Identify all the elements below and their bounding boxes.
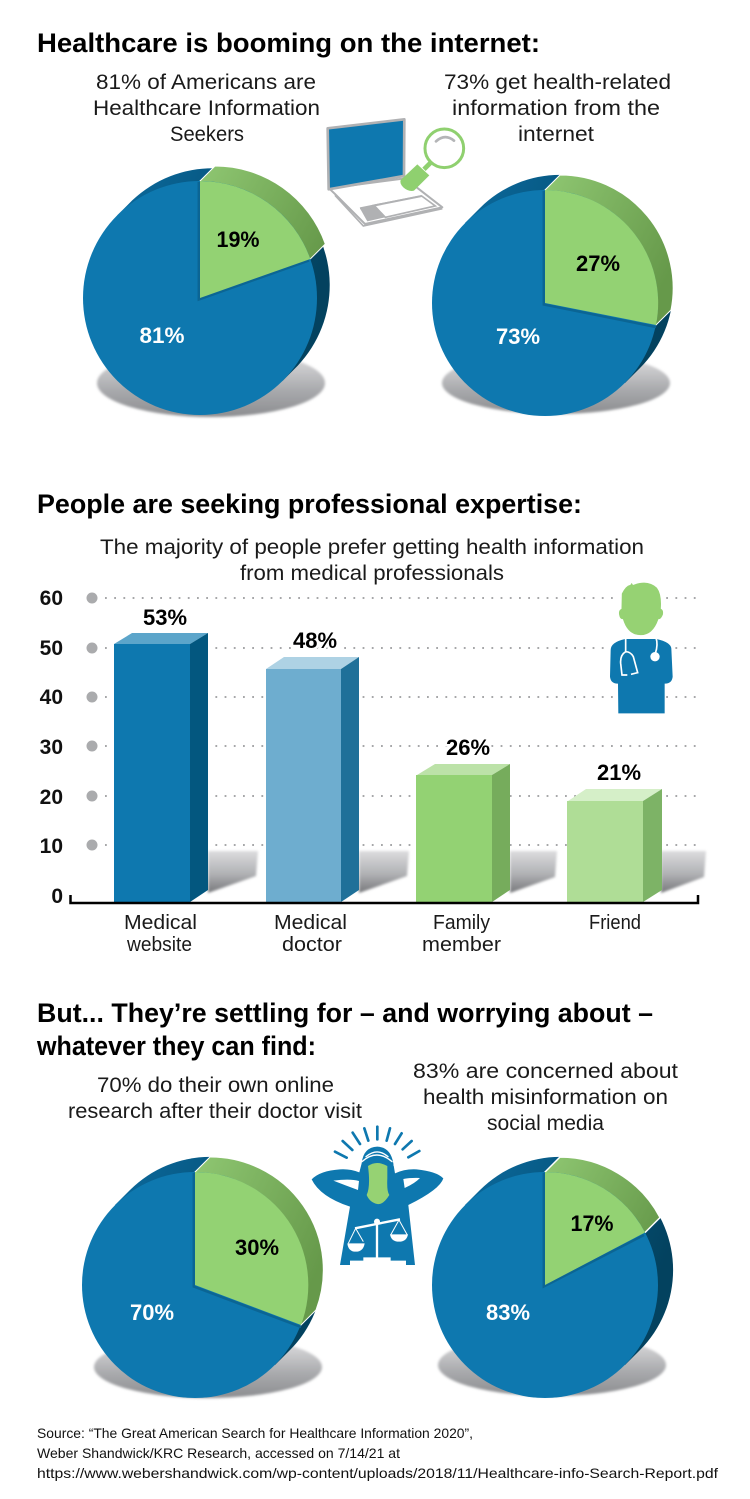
- y axis gridlines and dots: [86, 592, 700, 850]
- category labels: doctor: [282, 934, 342, 956]
- text: 83% misinformation: 83% are concerned about: [413, 1060, 678, 1083]
- heading: settling and worrying: whatever they can find:: [36, 1031, 316, 1061]
- bar value labels: 53%: [143, 605, 187, 630]
- bar value labels: 26%: [446, 735, 490, 760]
- pie chart: 70% / 30%: 70%: [130, 1300, 174, 1325]
- source note: [37, 1425, 718, 1481]
- heading: settling and worrying: But... They’re settling for – and worrying about –: [37, 998, 653, 1028]
- text: 70% own research: 70% do their own online: [97, 1074, 334, 1097]
- text: majority prefer professionals: [100, 536, 644, 585]
- category labels: Medical: [274, 912, 347, 934]
- pie chart: 73% / 27%: 73%: [496, 324, 540, 349]
- text: 70% own research: research after their doctor visit: [68, 1100, 362, 1123]
- source note: Weber Shandwick/KRC Research, accessed on 7/14/21 at: [37, 1445, 400, 1461]
- text: 81% seekers: [93, 71, 320, 146]
- bar: family member: [416, 764, 510, 902]
- y axis labels: 30: [40, 736, 63, 759]
- text: majority prefer professionals: The majority of people prefer getting health information: [100, 536, 644, 559]
- x axis: [70, 895, 698, 903]
- pie chart: 81% / 19%: 81%: [140, 323, 184, 348]
- y axis labels: 0: [51, 885, 63, 908]
- source note: https://www.webershandwick.com/wp-content/uploads/2018/11/Healthcare-info-Search-Report.pdf: [37, 1465, 718, 1481]
- bar value labels: 48%: [293, 628, 337, 653]
- y axis labels: 20: [40, 786, 63, 809]
- y axis labels: 60: [40, 587, 63, 610]
- pie chart: 70% / 30%: 30%: [235, 1235, 279, 1260]
- y axis labels: [40, 587, 63, 908]
- y axis labels: 40: [40, 686, 63, 709]
- text: 83% misinformation: health misinformation on: [423, 1086, 668, 1109]
- bar shadows: [208, 851, 706, 893]
- category labels: [124, 912, 641, 956]
- pie chart: 73% / 27%: [432, 175, 673, 416]
- text: 81% seekers: Seekers: [170, 123, 244, 146]
- pie chart: 83% / 17%: [432, 1157, 673, 1398]
- text: 83% misinformation: social media: [487, 1112, 604, 1135]
- text: 73% internet: 73% get health-related: [444, 71, 671, 94]
- category labels: website: [126, 934, 192, 956]
- category labels: Family: [433, 912, 490, 934]
- heading: professional expertise: People are seeking professional expertise:: [37, 489, 582, 519]
- y axis labels: 50: [40, 637, 63, 660]
- heading: healthcare booming: Healthcare is booming on the internet:: [37, 28, 540, 58]
- text: 81% seekers: 81% of Americans are: [96, 71, 316, 94]
- category labels: Medical: [124, 912, 197, 934]
- text: 81% seekers: Healthcare Information: [93, 97, 320, 120]
- icon: laptop with magnifying glass: [328, 119, 464, 226]
- bar chart: [40, 587, 706, 956]
- pie chart: 83% / 17%: 17%: [570, 1211, 614, 1236]
- pie chart: 83% / 17%: 83%: [486, 1300, 530, 1325]
- bar: medical doctor: [266, 657, 359, 902]
- heading: settling and worrying: [36, 998, 653, 1061]
- pie chart: 81% / 19%: 19%: [216, 227, 260, 252]
- text: 73% internet: [444, 71, 671, 146]
- source note: Source: “The Great American Search for Healthcare Information 2020”,: [37, 1425, 473, 1441]
- text: 70% own research: [68, 1074, 362, 1123]
- bar value labels: [143, 605, 641, 785]
- text: 83% misinformation: [413, 1060, 678, 1135]
- text: 73% internet: information from the: [452, 97, 660, 120]
- pie chart: 81% / 19%: [83, 166, 330, 417]
- y axis labels: 10: [40, 835, 63, 858]
- text: 73% internet: internet: [518, 123, 594, 146]
- icon: stressed person with scales: [312, 1127, 443, 1265]
- pie chart: 70% / 30%: [82, 1157, 323, 1398]
- icon: doctor with stethoscope: [609, 581, 673, 714]
- category labels: member: [422, 934, 501, 956]
- text: majority prefer professionals: from medical professionals: [240, 562, 504, 585]
- bar: friend: [567, 789, 662, 902]
- pie chart: 73% / 27%: 27%: [576, 251, 620, 276]
- bar value labels: 21%: [597, 760, 641, 785]
- category labels: Friend: [589, 912, 641, 934]
- bar: medical website: [114, 633, 208, 902]
